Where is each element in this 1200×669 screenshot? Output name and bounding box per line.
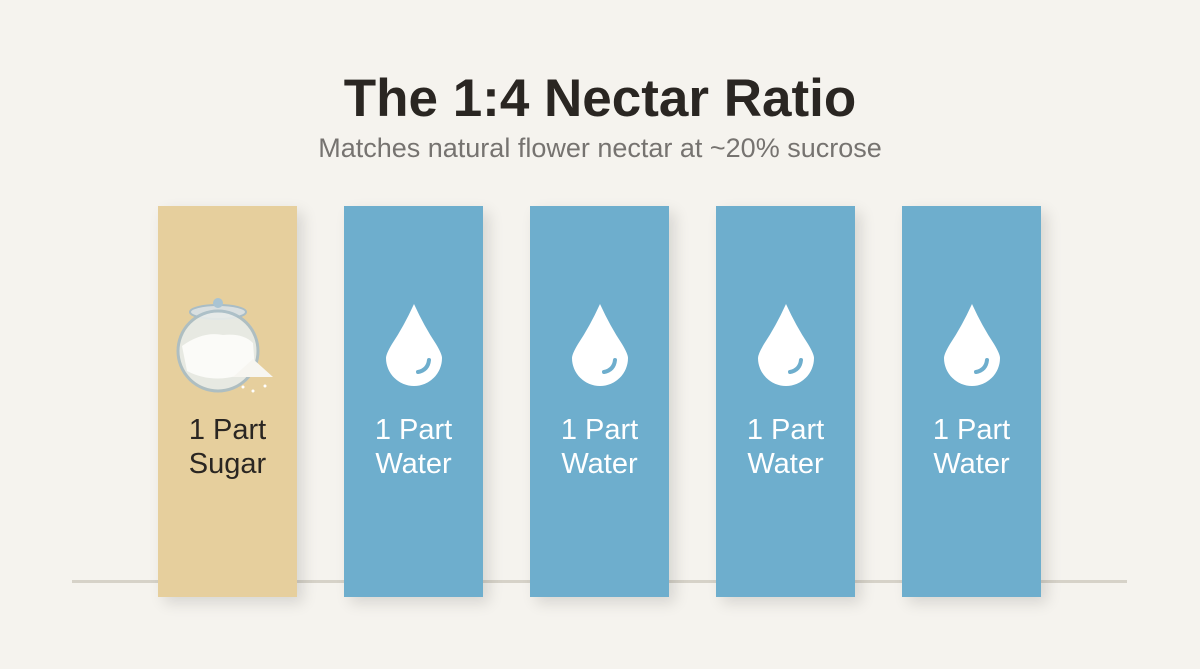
label: 1 Part	[375, 414, 452, 446]
panel: water 3	[716, 206, 855, 597]
icon: sugar jar	[176, 298, 273, 392]
icon: drop	[758, 304, 814, 386]
label	[933, 414, 1010, 480]
panel: water 2	[530, 206, 669, 597]
label: sugar	[189, 414, 266, 480]
label: Water	[933, 448, 1010, 480]
icon: drop	[944, 304, 1000, 386]
label: sugar: 1 Part	[189, 414, 266, 446]
icon: drop	[572, 304, 628, 386]
panel: water 1	[344, 206, 483, 597]
icon: drop	[386, 304, 442, 386]
label: Water	[561, 448, 638, 480]
label: sugar: Sugar	[189, 448, 266, 480]
label: Water	[375, 448, 452, 480]
panel: water 4	[902, 206, 1041, 597]
subtitle: Matches natural flower nectar at ~20% sucrose	[318, 133, 882, 163]
label: 1 Part	[933, 414, 1010, 446]
label: 1 Part	[747, 414, 824, 446]
panel: sugar	[158, 206, 297, 597]
label: 1 Part	[561, 414, 638, 446]
label	[375, 414, 452, 480]
label	[561, 414, 638, 480]
label	[747, 414, 824, 480]
baseline	[72, 580, 1127, 583]
title: The 1:4 Nectar Ratio	[344, 69, 856, 128]
label: Water	[747, 448, 824, 480]
